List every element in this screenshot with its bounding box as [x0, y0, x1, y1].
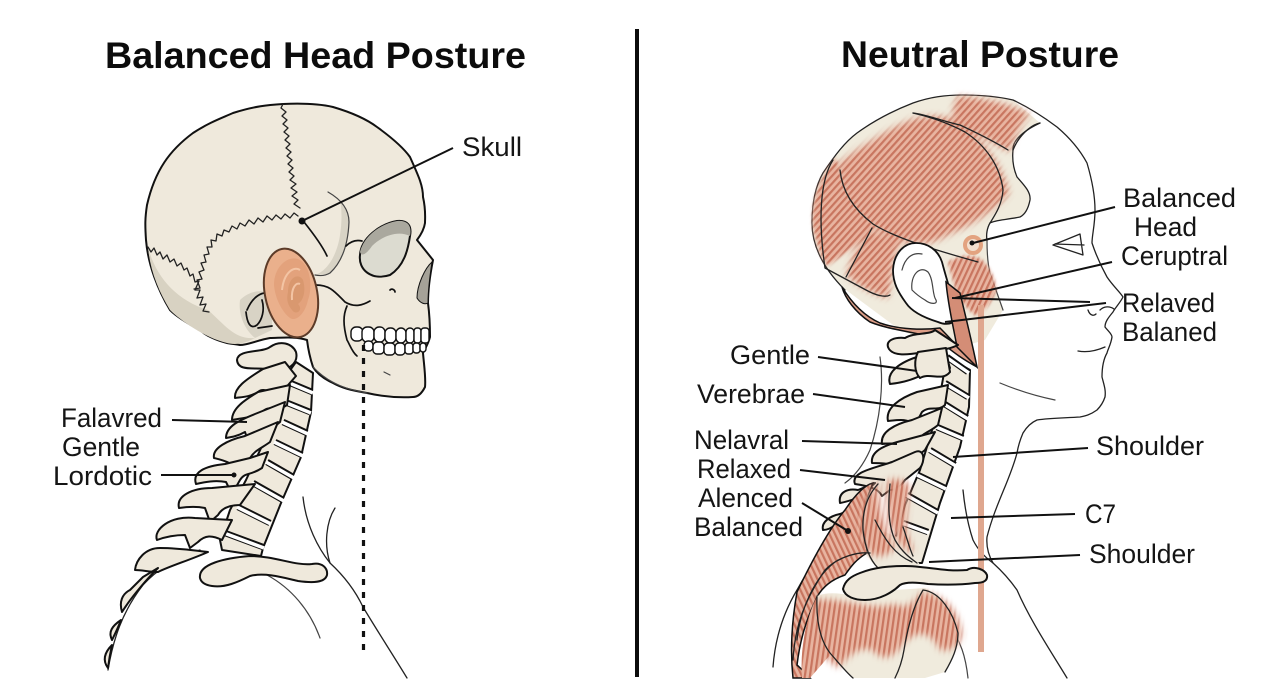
callout: Alenced Balanced: Balanced — [694, 512, 803, 542]
intervertebral discs — [902, 357, 969, 533]
muscle: strap neck — [946, 282, 977, 367]
callout: Balanced Head Ceruptral: Head — [1134, 212, 1197, 242]
muscle: jaw and neck — [946, 254, 998, 317]
body contour lines — [108, 497, 407, 678]
callout: Shoulder lower — [929, 539, 1195, 569]
vertebral column — [220, 362, 313, 556]
muscle: temporal and scalp — [836, 91, 1033, 302]
face details — [1053, 234, 1084, 255]
teeth — [351, 327, 429, 355]
callout: Balanced Head Ceruptral: Balanced — [1123, 183, 1236, 213]
callout: Shoulder upper: Shoulder — [1096, 431, 1204, 461]
mastoid shading — [240, 291, 272, 338]
callout: Nelavral: Nelavral — [694, 425, 789, 455]
muscle: lower neck band — [842, 287, 977, 367]
muscle strap lines — [863, 484, 917, 568]
reference line: dotted plumb line — [362, 345, 365, 652]
icon: ear — [256, 244, 326, 342]
temple ridge — [304, 222, 327, 256]
callout: Relaxed — [697, 454, 885, 484]
mastoid — [246, 293, 272, 328]
callout: Relaved Balaned: Balaned — [1122, 317, 1217, 347]
panel: balanced head posture — [53, 104, 522, 678]
skull shading — [148, 247, 255, 344]
vertebral column — [895, 357, 970, 563]
callout: Falavred Gentle Lordotic: Falavred — [61, 403, 162, 433]
callout: Alenced Balanced: Alenced — [698, 483, 793, 513]
callout: Falavred Gentle Lordotic — [53, 403, 247, 491]
callout: Shoulder upper — [953, 431, 1204, 461]
spinous processes — [888, 330, 958, 354]
muscle: neck straps — [856, 474, 916, 561]
muscle: lower back — [802, 597, 830, 678]
cervical spine — [105, 343, 313, 668]
callout: C7: C7 — [1085, 499, 1116, 529]
spinous processes — [237, 343, 296, 370]
callout: C7 — [951, 499, 1116, 529]
temple shading — [315, 200, 349, 275]
callout: Balanced Head Ceruptral: Ceruptral — [1121, 241, 1228, 271]
intervertebral discs — [224, 382, 313, 548]
callout: Relaxed: Relaxed — [697, 454, 791, 484]
head and body outline — [773, 95, 1123, 678]
clavicle — [200, 556, 327, 586]
eye socket — [360, 221, 410, 277]
muscle: trapezius — [792, 483, 873, 678]
callout: Shoulder lower: Shoulder — [1089, 539, 1195, 569]
callout: Falavred Gentle Lordotic: Lordotic — [53, 461, 152, 491]
callout: Gentle: Gentle — [730, 340, 810, 370]
panel: neutral posture — [694, 80, 1236, 690]
skull — [145, 104, 433, 397]
cheekbone and jaw — [316, 285, 370, 305]
ear inner lines — [902, 254, 936, 303]
callout: Relaved Balaned — [945, 288, 1217, 347]
ear — [893, 243, 958, 324]
nasal opening — [417, 262, 432, 304]
callout: Skull: Skull — [462, 132, 522, 162]
callout: Balanced Head Ceruptral — [955, 183, 1236, 298]
muscle lines — [821, 113, 1040, 296]
title: Balanced Head Posture: Balanced Head Posture — [105, 35, 526, 76]
muscle marker — [965, 237, 981, 253]
callout: Alenced Balanced — [694, 483, 851, 542]
muscle: lower back lines — [793, 553, 870, 660]
cervical spine — [823, 330, 970, 563]
cream behind neck straps — [866, 530, 920, 570]
callout: Skull — [298, 132, 522, 224]
callout: Verebrae — [697, 379, 905, 409]
clavicle — [843, 566, 987, 600]
muscle: occipital — [810, 157, 875, 268]
reference line: vertical orange — [978, 305, 984, 652]
muscle: deltoid — [808, 588, 967, 679]
callout: Gentle — [730, 340, 917, 371]
cranial sutures — [281, 104, 300, 208]
title: Neutral Posture: Neutral Posture — [841, 34, 1119, 75]
center divider — [635, 29, 639, 677]
callout: Falavred Gentle Lordotic: Gentle — [62, 432, 140, 462]
callout: Verebrae: Verebrae — [697, 379, 805, 409]
callout: Relaved Balaned: Relaved — [1122, 288, 1215, 318]
callout: Nelavral — [694, 425, 897, 455]
